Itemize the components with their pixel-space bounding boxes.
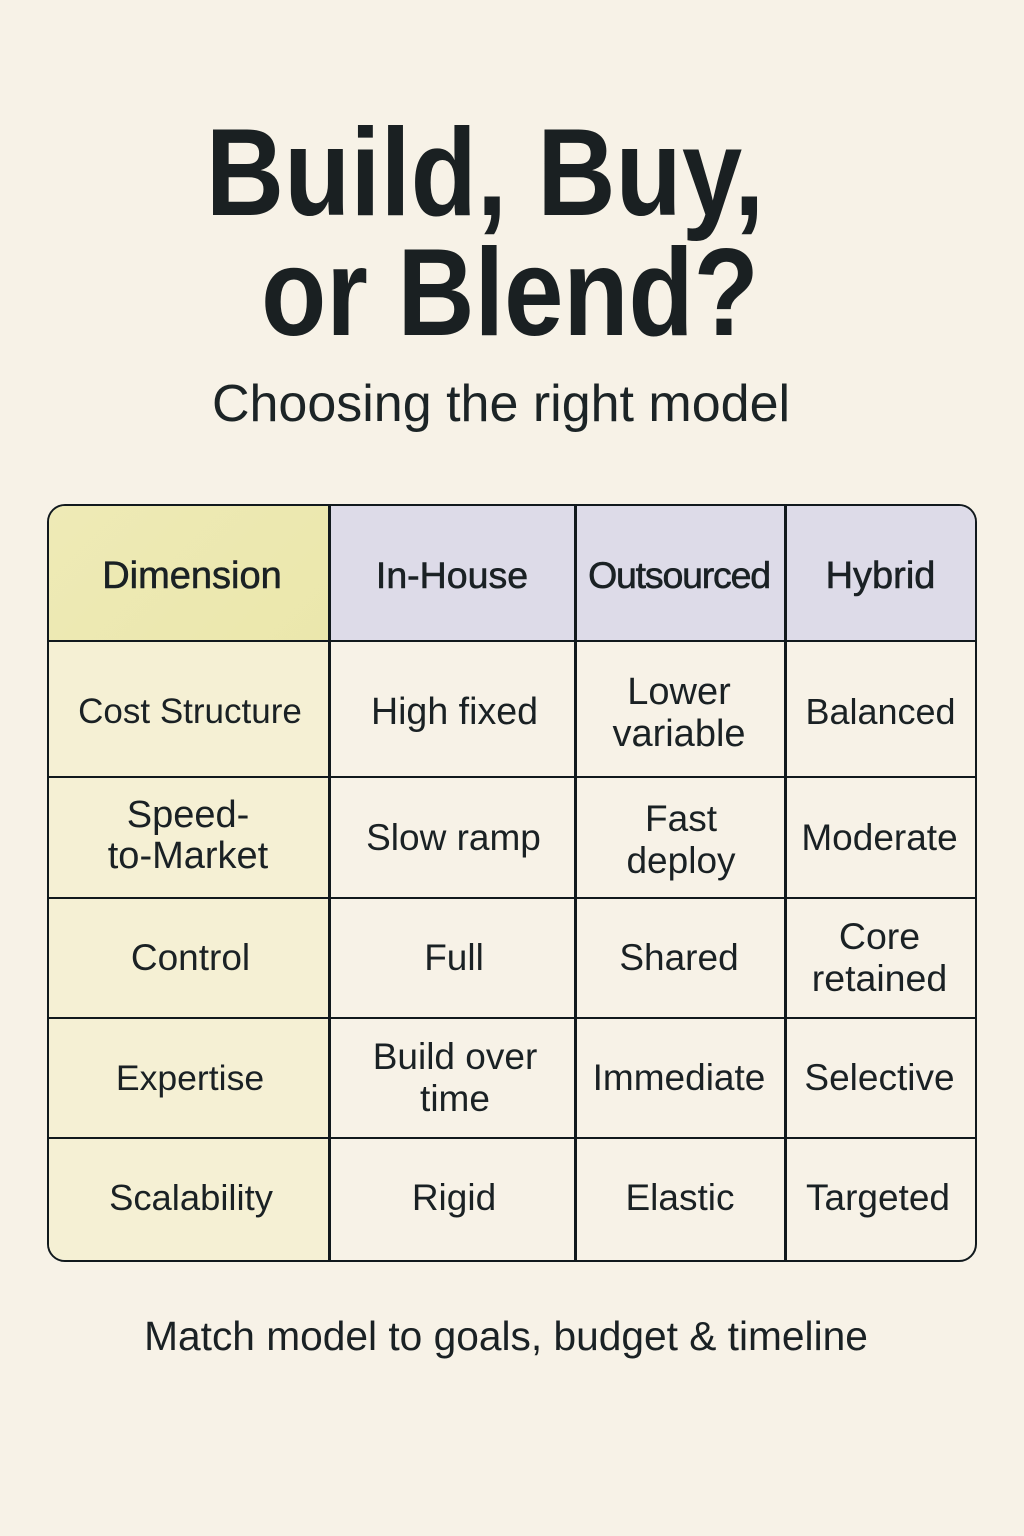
row: control: Full (424, 937, 484, 978)
row: scalability: Elastic (626, 1177, 734, 1218)
row: speed-to-market: Moderate (801, 816, 958, 858)
row: cost structure: variable (612, 713, 746, 755)
row: scalability: Scalability (109, 1177, 273, 1218)
comparison table (47, 504, 977, 1262)
row: expertise (116, 1036, 955, 1119)
header row: Outsourced (588, 554, 770, 596)
row: cost structure: Balanced (805, 691, 956, 732)
row: speed-to-market: to-Market (108, 834, 268, 876)
row: scalability: Rigid (412, 1177, 496, 1218)
title line 1: Build, Buy, (206, 104, 764, 242)
header row: Dimension (102, 554, 282, 596)
title (206, 104, 764, 362)
row: speed-to-market: Fast (645, 798, 717, 838)
footer note: Match model to goals, budget & timeline (144, 1313, 868, 1359)
header row: In-House (376, 554, 528, 596)
row: cost structure: Cost Structure (78, 692, 302, 731)
row: expertise: Selective (804, 1057, 955, 1098)
table background (47, 504, 977, 1262)
row: control: Core (839, 915, 920, 957)
header row (102, 554, 935, 596)
row: control: Shared (619, 937, 739, 978)
row: scalability (109, 1177, 950, 1218)
row: speed-to-market: deploy (626, 840, 736, 880)
row: expertise: time (420, 1078, 490, 1119)
row: expertise: Expertise (116, 1058, 264, 1098)
row: speed-to-market: Speed- (127, 794, 249, 836)
row: speed-to-market: Slow ramp (366, 816, 541, 858)
header row: Hybrid (826, 554, 935, 596)
row: expertise: Immediate (593, 1057, 765, 1098)
row: cost structure: High fixed (371, 690, 538, 732)
row: expertise: Build over (373, 1036, 537, 1077)
row: cost structure (78, 671, 956, 755)
row: control (131, 915, 947, 999)
row: scalability: Targeted (806, 1177, 950, 1218)
title line 2: or Blend? (261, 224, 758, 362)
row: speed-to-market (108, 794, 958, 880)
subtitle: Choosing the right model (212, 375, 790, 433)
row: control: Control (131, 937, 250, 978)
row: cost structure: Lower (627, 671, 731, 713)
row: control: retained (812, 957, 947, 999)
